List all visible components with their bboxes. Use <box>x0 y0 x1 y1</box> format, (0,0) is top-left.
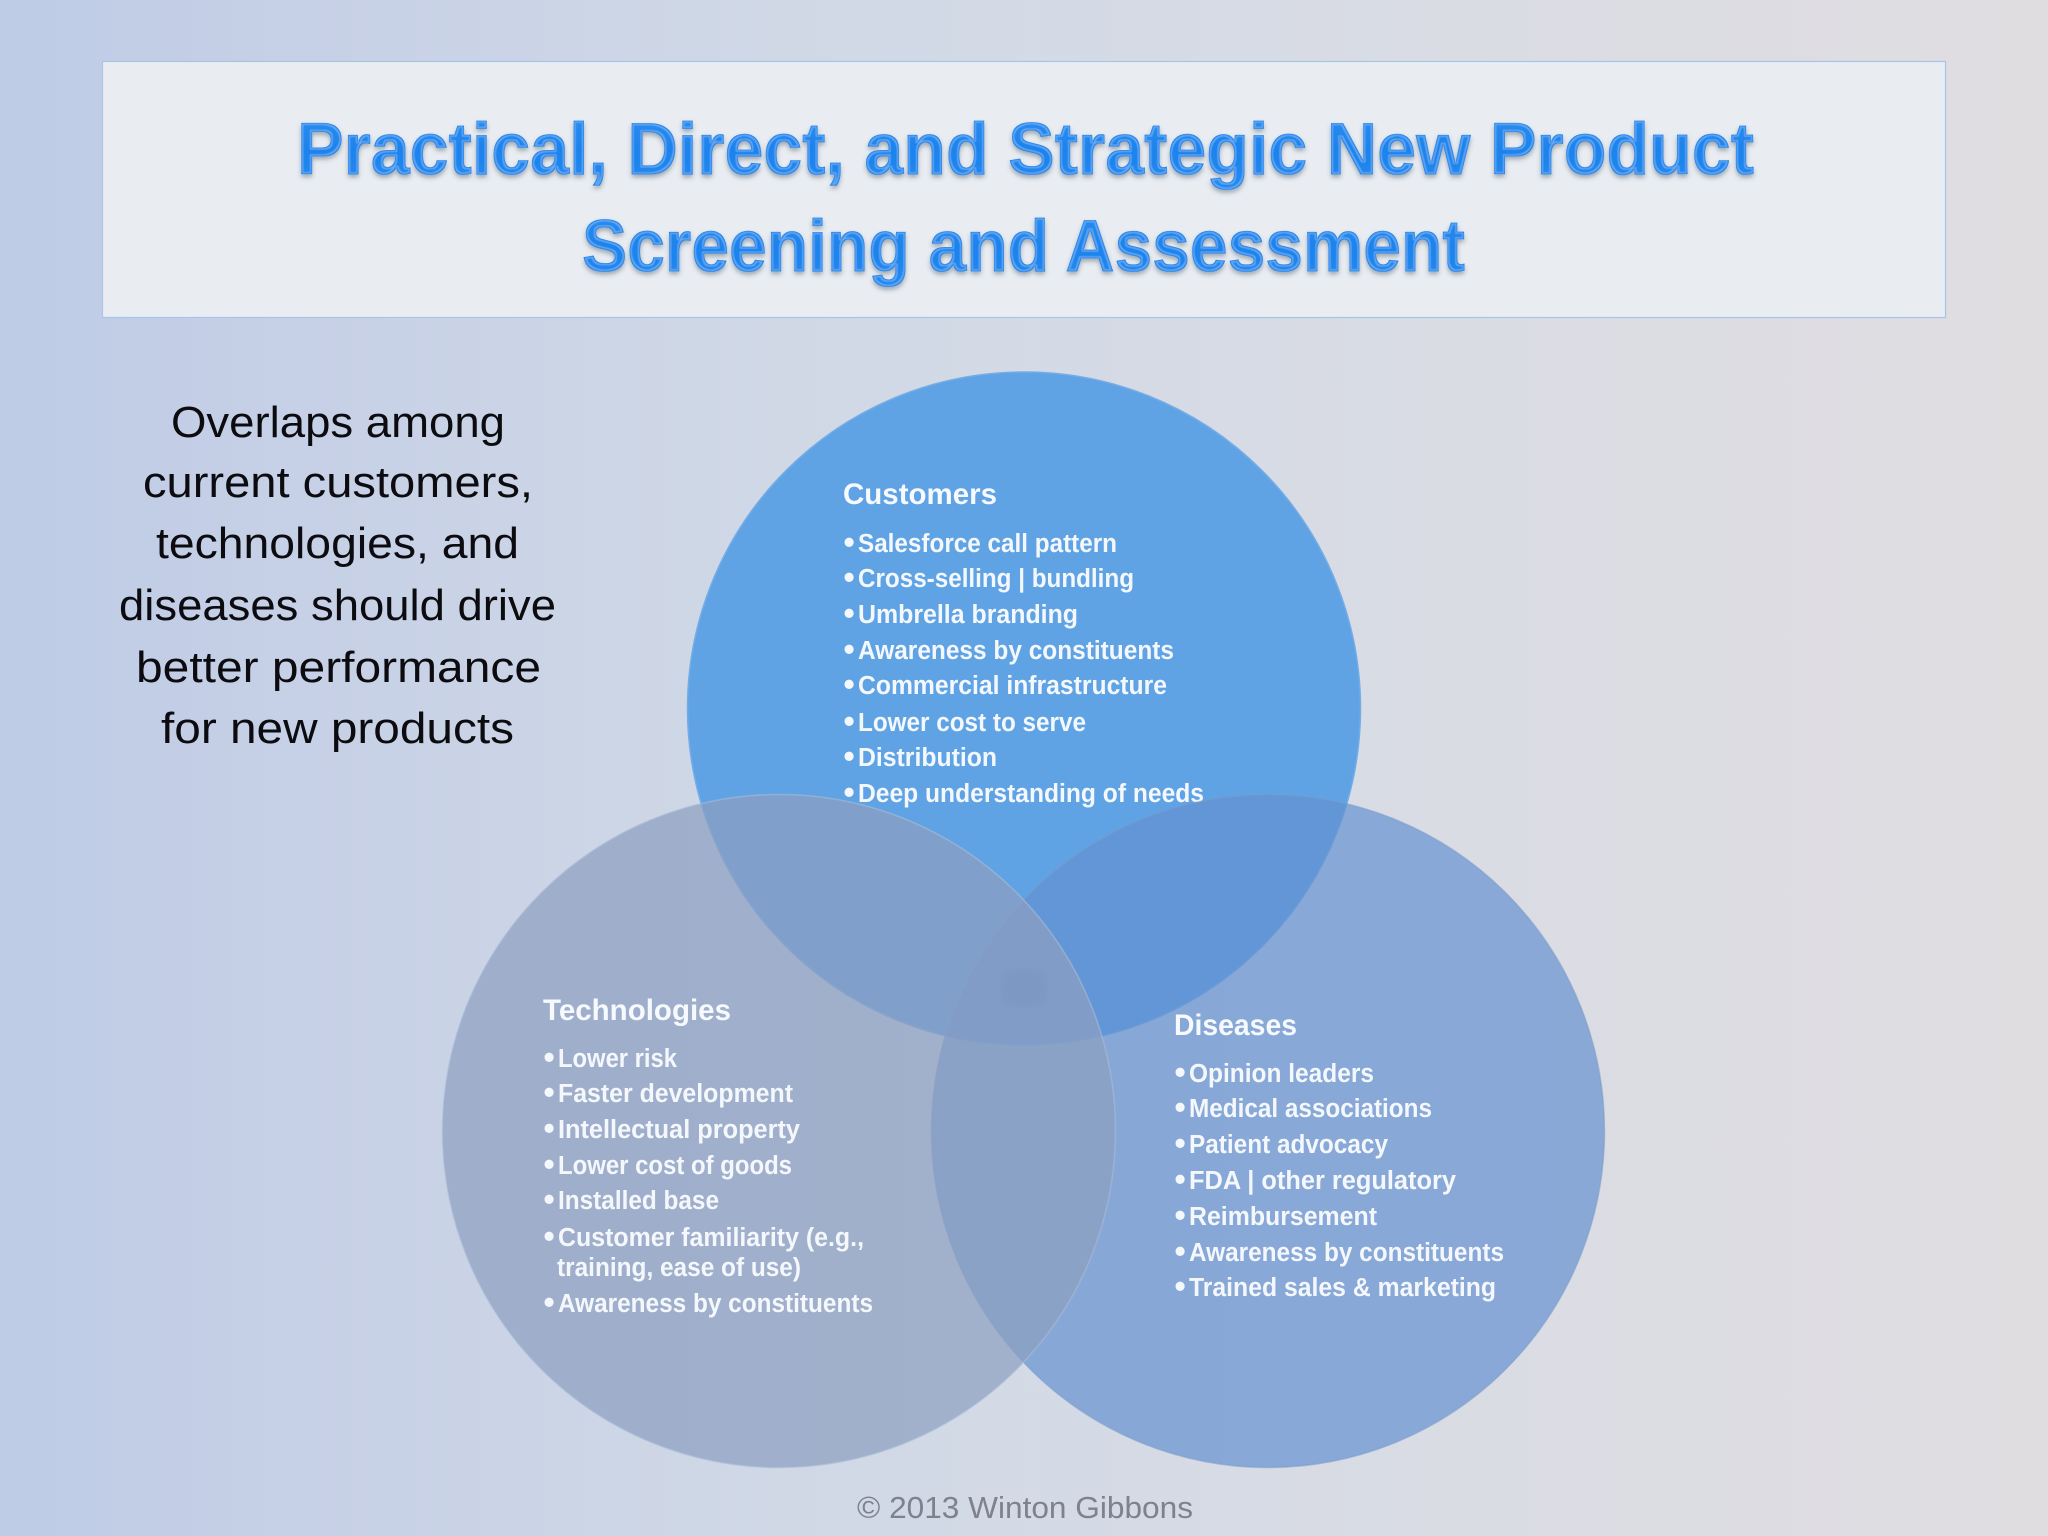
list: customers items: • <box>844 738 855 774</box>
list: customers items: Deep understanding of needs <box>858 780 1204 808</box>
list: technologies items: • <box>544 1039 555 1075</box>
list: customers items <box>844 524 1204 810</box>
side text: overlaps statement: diseases should drive <box>119 581 556 630</box>
centre overlap mark <box>1001 968 1047 1008</box>
list: customers items: • <box>844 703 855 739</box>
title banner: Practical, Direct, and Strategic New Product <box>297 109 1754 190</box>
panel: diseases circle <box>932 794 1604 1468</box>
list: diseases items: Medical associations <box>1189 1095 1432 1123</box>
list: technologies items: Lower risk <box>558 1045 678 1073</box>
heading: customers: Customers <box>843 478 997 511</box>
list: diseases items: • <box>1174 1161 1186 1197</box>
list: diseases items: • <box>1174 1089 1186 1125</box>
side text: overlaps statement: Overlaps among <box>171 398 505 447</box>
side text: overlaps statement: for new products <box>161 704 514 753</box>
list: technologies items: training, ease of use) <box>557 1254 801 1282</box>
panel: technologies circle <box>442 794 1116 1468</box>
list: technologies items <box>544 1039 873 1320</box>
list: diseases items: Patient advocacy <box>1189 1131 1389 1159</box>
list: diseases items: Reimbursement <box>1189 1203 1377 1231</box>
list: technologies items: • <box>544 1284 555 1320</box>
side text: overlaps statement: current customers, <box>143 458 533 507</box>
list: technologies items: Intellectual property <box>558 1116 801 1144</box>
list: technologies items: • <box>544 1146 555 1182</box>
list: technologies items: • <box>544 1110 555 1146</box>
list: customers items: • <box>844 666 855 702</box>
heading: technologies: Technologies <box>543 994 731 1027</box>
list: diseases items: • <box>1174 1233 1186 1269</box>
list: diseases items: FDA | other regulatory <box>1189 1167 1457 1195</box>
list: technologies items: Lower cost of goods <box>558 1152 792 1180</box>
list: technologies items: Customer familiarity (e.g., <box>558 1224 864 1252</box>
side text: overlaps statement <box>119 398 556 753</box>
list: diseases items: • <box>1174 1054 1186 1090</box>
list: diseases items: Opinion leaders <box>1189 1060 1374 1088</box>
list: customers items: Salesforce call pattern <box>858 530 1117 558</box>
list: customers items: Cross-selling | bundling <box>858 565 1134 593</box>
list: technologies items: • <box>544 1218 555 1254</box>
list: technologies items: • <box>544 1074 555 1110</box>
list: diseases items <box>1174 1054 1504 1304</box>
list: diseases items: • <box>1174 1197 1186 1233</box>
list: technologies items: Awareness by constituents <box>558 1290 873 1318</box>
list: diseases items: Awareness by constituents <box>1189 1239 1504 1267</box>
list: technologies items: Faster development <box>558 1080 793 1108</box>
list: customers items: • <box>844 595 855 631</box>
side text: overlaps statement: better performance <box>136 643 541 692</box>
list: technologies items: • <box>544 1181 555 1217</box>
list: customers items: Umbrella branding <box>858 601 1078 629</box>
list: customers items: • <box>844 524 855 560</box>
title banner: Screening and Assessment <box>582 206 1465 287</box>
list: technologies items: Installed base <box>558 1187 719 1215</box>
list: customers items: • <box>844 774 855 810</box>
list: diseases items: Trained sales & marketing <box>1189 1274 1496 1302</box>
list: customers items: Awareness by constituents <box>858 637 1174 665</box>
panel: customers circle <box>688 372 1360 1045</box>
footer copyright: © 2013 Winton Gibbons <box>857 1490 1193 1525</box>
list: customers items: • <box>844 559 855 595</box>
list: customers items: Lower cost to serve <box>858 709 1086 737</box>
list: diseases items: • <box>1174 1125 1186 1161</box>
heading: diseases: Diseases <box>1174 1009 1297 1042</box>
list: customers items: Distribution <box>858 744 997 772</box>
side text: overlaps statement: technologies, and <box>156 519 519 568</box>
title banner <box>102 62 1946 318</box>
list: customers items: Commercial infrastructure <box>858 672 1167 700</box>
list: customers items: • <box>844 631 855 667</box>
list: diseases items: • <box>1174 1268 1186 1304</box>
